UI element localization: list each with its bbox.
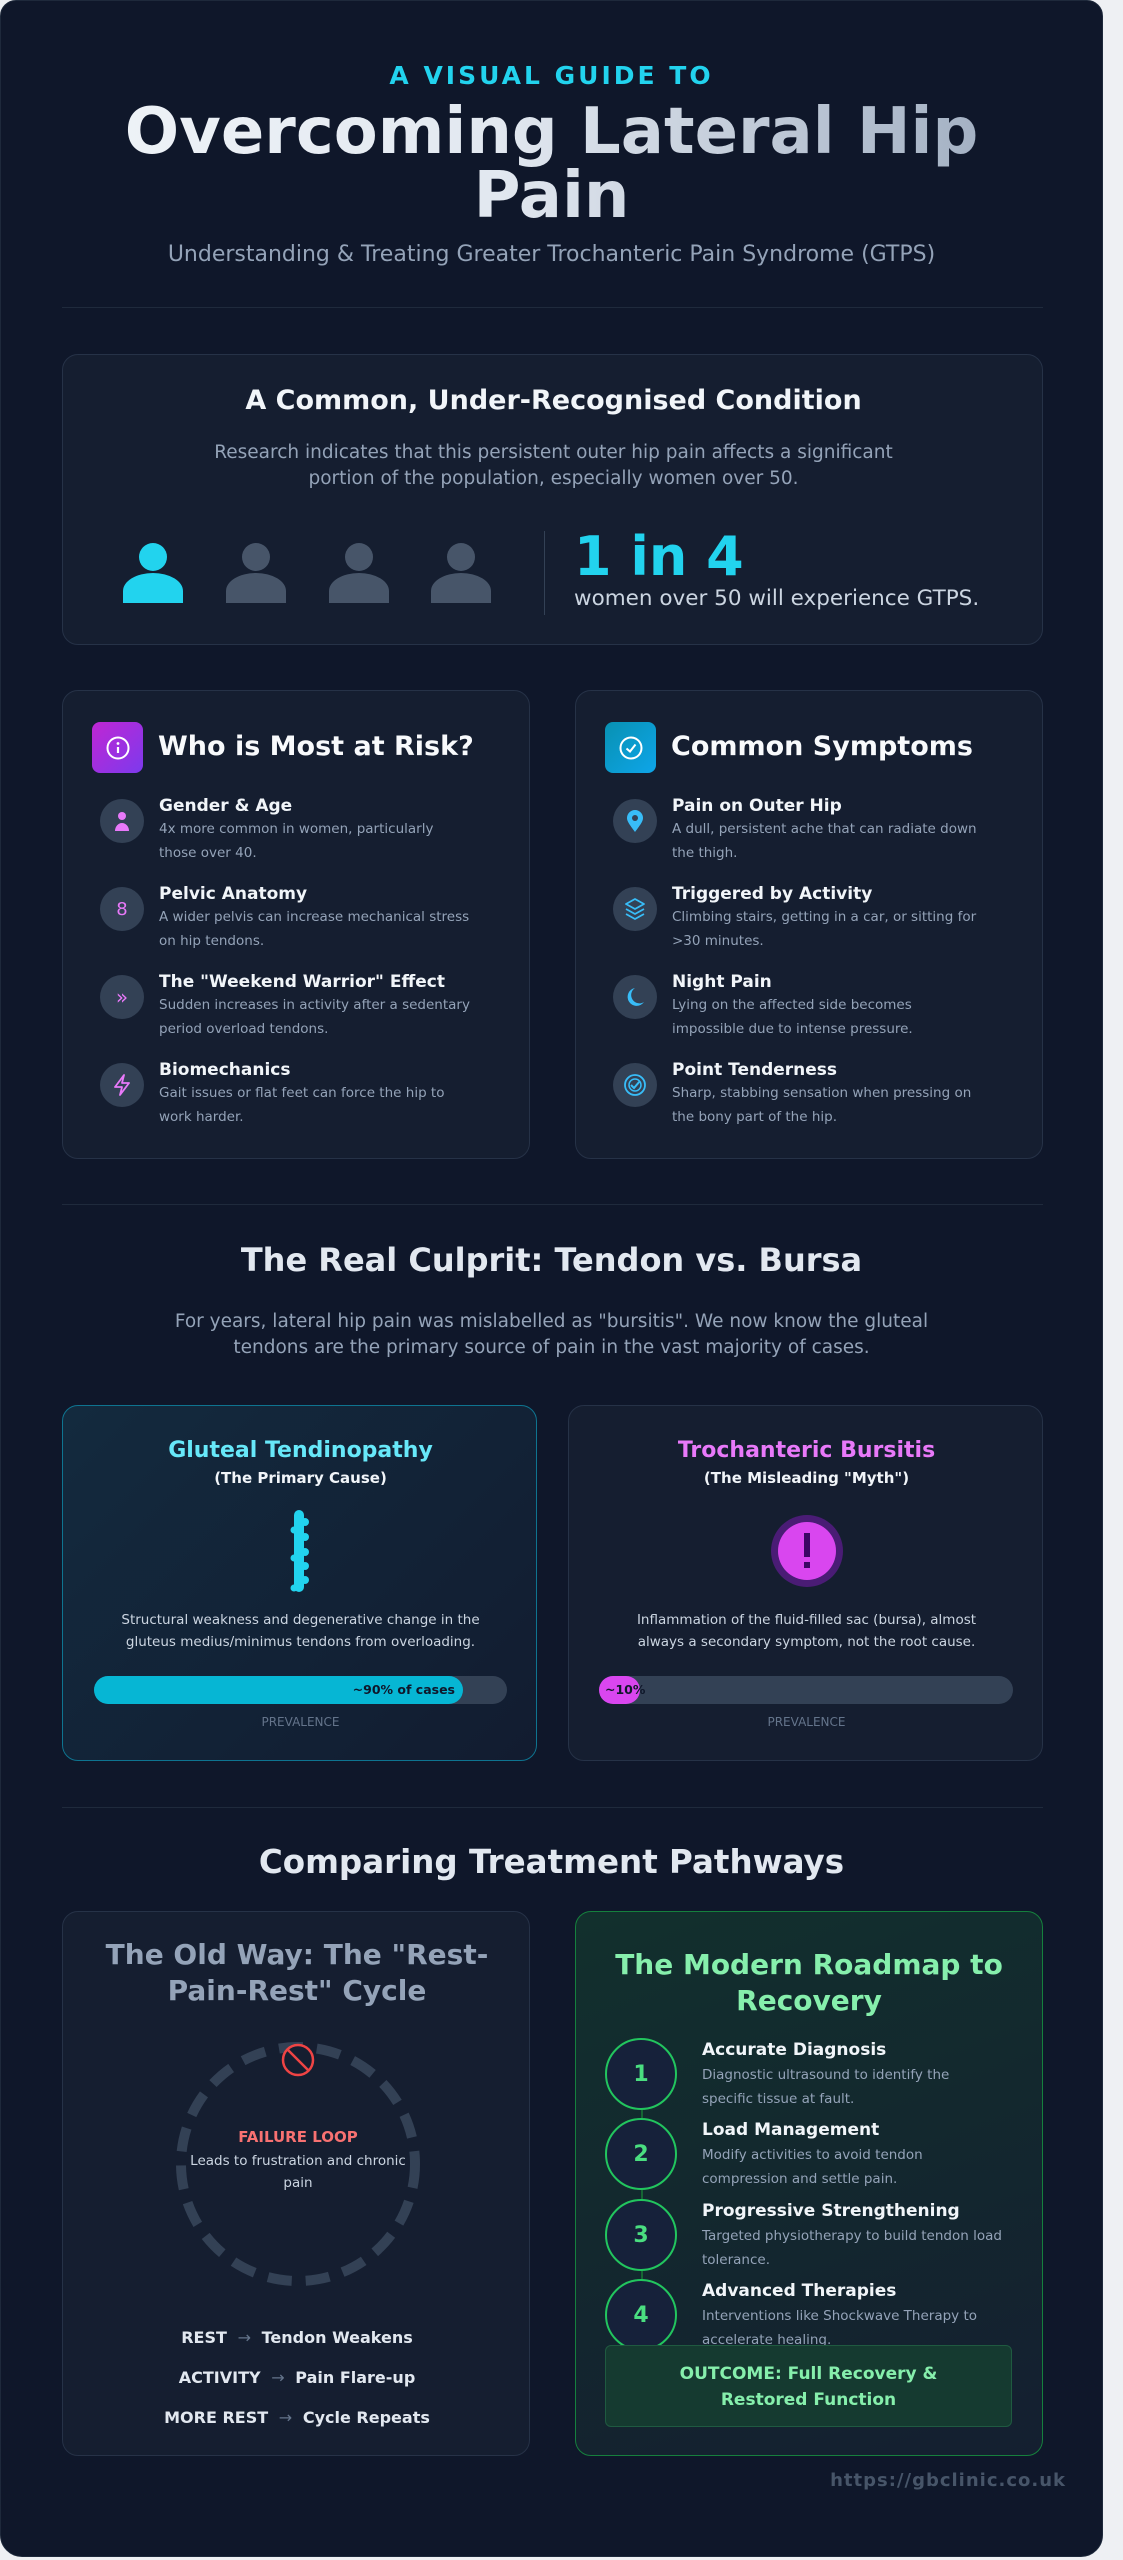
card description: gluteus medius/minimus tendons from overloading.: [126, 1634, 475, 1650]
cycle list: MORE REST → Cycle Repeats: [164, 2408, 430, 2427]
card description: [121, 1612, 480, 1650]
symptom: outer hip: [613, 796, 977, 861]
step 4: [605, 2279, 977, 2348]
step 4: Interventions like Shockwave Therapy to accelerate healing.: [702, 2308, 977, 2348]
roadmap title: Recovery: [736, 1984, 882, 2017]
failure loop diagram: Leads to frustration and chronic: [190, 2153, 406, 2169]
step 2: Modify activities to avoid tendon compression and settle pain.: [702, 2147, 923, 2187]
card subtitle: (The Misleading "Myth"): [704, 1469, 909, 1487]
icon: check badge: [605, 722, 656, 773]
risk: gender & age: [100, 796, 433, 861]
culprit description: tendons are the primary source of pain in the vast majority of cases.: [233, 1337, 870, 1358]
step 3: 3: [633, 2222, 649, 2248]
failure loop diagram: [176, 2042, 420, 2286]
panel: modern roadmap: [575, 1911, 1043, 2456]
risk: weekend warrior: »: [116, 985, 128, 1009]
prevalence label: PREVALENCE: [261, 1715, 340, 1729]
risk: biomechanics: Biomechanics: [159, 1060, 290, 1080]
header eyebrow: A VISUAL GUIDE TO: [389, 61, 714, 90]
card subtitle: (The Primary Cause): [214, 1469, 387, 1487]
risk: gender & age: Gender & Age: [159, 796, 292, 816]
symptom: night pain: [613, 972, 913, 1037]
step 2: Load Management: [702, 2120, 879, 2140]
culprit description: For years, lateral hip pain was mislabelled as "bursitis". We now know the gluteal: [175, 1311, 928, 1332]
card title: Trochanteric Bursitis: [678, 1438, 935, 1463]
title: Overcoming Lateral Hip: [125, 95, 978, 169]
heading: risk: Who is Most at Risk?: [158, 731, 474, 762]
outcome box: [605, 2345, 1012, 2427]
stat: 1 in 4: [574, 525, 979, 611]
card description: Inflammation of the fluid-filled sac (bursa), almost: [637, 1612, 976, 1628]
prevalence label: PREVALENCE: [767, 1715, 846, 1729]
cycle list: [164, 2328, 430, 2427]
panel: common symptoms: [575, 690, 1043, 1159]
bar: 10%: [599, 1676, 1013, 1704]
card title: Gluteal Tendinopathy: [168, 1438, 433, 1463]
symptom: activity: Triggered by Activity: [672, 884, 872, 904]
outcome box: Restored Function: [721, 2390, 896, 2410]
step 1: Accurate Diagnosis: [702, 2040, 886, 2060]
symptom: point tenderness: [613, 1060, 971, 1125]
symptom: activity: Climbing stairs, getting in a car, or sitting for >30 minutes.: [672, 909, 976, 949]
outcome box: OUTCOME: Full Recovery &: [680, 2364, 937, 2384]
heading: symptoms: Common Symptoms: [671, 731, 973, 762]
symptom: point tenderness: Point Tenderness: [672, 1060, 837, 1080]
card description: always a secondary symptom, not the root cause.: [638, 1634, 975, 1650]
prevalence heading: A Common, Under-Recognised Condition: [245, 385, 862, 416]
step 1: [605, 2038, 949, 2110]
symptom: night pain: Lying on the affected side becomes impossible due to intense pressure.: [672, 997, 913, 1037]
step 1: 1: [633, 2062, 649, 2086]
subtitle: Understanding & Treating Greater Trochanteric Pain Syndrome (GTPS): [168, 242, 935, 267]
step 2: 2: [633, 2142, 649, 2166]
card description: [637, 1612, 976, 1650]
failure loop diagram: FAILURE LOOP: [238, 2128, 358, 2146]
step 4: Advanced Therapies: [702, 2281, 896, 2301]
card description: Structural weakness and degenerative change in the: [121, 1612, 480, 1628]
step 2: [605, 2118, 923, 2190]
stat: 1 in 4: women over 50 will experience GTPS.: [574, 586, 979, 611]
roadmap title: [615, 1948, 1003, 2017]
risk: weekend warrior: [100, 972, 470, 1037]
risk: biomechanics: Gait issues or flat feet can force the hip to work harder.: [159, 1085, 444, 1125]
icon: warning bubble: [771, 1515, 843, 1587]
risk: gender & age: 4x more common in women, particularly those over 40.: [159, 821, 433, 861]
risk: pelvic anatomy: 8: [116, 898, 128, 920]
panel: old way: [62, 1911, 530, 2456]
risk: pelvic anatomy: Pelvic Anatomy: [159, 884, 307, 904]
bar: 90%: ~90% of cases: [353, 1682, 455, 1697]
risk: pelvic anatomy: A wider pelvis can increase mechanical stress on hip tendons.: [159, 909, 469, 949]
card: gluteal tendinopathy: [62, 1405, 537, 1761]
bar: 10%: ~10%: [605, 1682, 645, 1697]
risk: biomechanics: [100, 1060, 444, 1125]
panel: who is most at risk: [62, 690, 530, 1159]
risk: weekend warrior: Sudden increases in activity after a sedentary period overload tendons.: [159, 997, 470, 1037]
cycle list: ACTIVITY → Pain Flare-up: [179, 2368, 415, 2387]
step 4: 4: [633, 2302, 649, 2328]
step 1: Diagnostic ultrasound to identify the specific tissue at fault.: [702, 2067, 949, 2107]
prevalence description: [214, 442, 893, 489]
symptom: night pain: Night Pain: [672, 972, 772, 992]
failure loop diagram: pain: [283, 2175, 313, 2191]
culprit description: [175, 1311, 928, 1358]
risk: weekend warrior: The "Weekend Warrior" Effect: [159, 972, 445, 992]
prevalence description: Research indicates that this persistent outer hip pain affects a significant: [214, 442, 893, 463]
roadmap connector: [641, 2074, 643, 2316]
old way title: The Old Way: The "Rest-: [106, 1938, 488, 1971]
prevalence description: portion of the population, especially women over 50.: [308, 468, 799, 489]
stat: 1 in 4: 1 in 4: [574, 525, 744, 588]
symptom: outer hip: Pain on Outer Hip: [672, 796, 842, 816]
footer url: https://gbclinic.co.uk: [830, 2470, 1066, 2491]
roadmap title: The Modern Roadmap to: [615, 1948, 1003, 1981]
title: [0, 100, 1103, 228]
old way title: Pain-Rest" Cycle: [168, 1974, 426, 2007]
step 3: Progressive Strengthening: [702, 2201, 960, 2221]
step 3: Targeted physiotherapy to build tendon load tolerance.: [702, 2228, 1002, 2268]
symptom: activity: [613, 884, 976, 949]
panel: prevalence: [62, 354, 1043, 645]
section heading: real culprit: The Real Culprit: Tendon vs. Bursa: [241, 1241, 862, 1279]
step 3: [605, 2199, 1002, 2271]
old way title: [106, 1938, 488, 2007]
icon: ban: [282, 2044, 314, 2076]
symptom: point tenderness: Sharp, stabbing sensation when pressing on the bony part of the hip.: [672, 1085, 971, 1125]
title: Pain: [474, 159, 629, 233]
card: trochanteric bursitis: [568, 1405, 1043, 1761]
icon: people 1 in 4: [123, 543, 491, 603]
icon: tendon: [290, 1510, 309, 1592]
symptom: outer hip: A dull, persistent ache that can radiate down the thigh.: [672, 821, 977, 861]
bar: 90%: [94, 1676, 507, 1704]
cycle list: REST → Tendon Weakens: [181, 2328, 413, 2347]
section heading: treatment: Comparing Treatment Pathways: [259, 1843, 844, 1881]
risk: pelvic anatomy: [100, 884, 469, 949]
icon: info badge: [92, 722, 143, 773]
